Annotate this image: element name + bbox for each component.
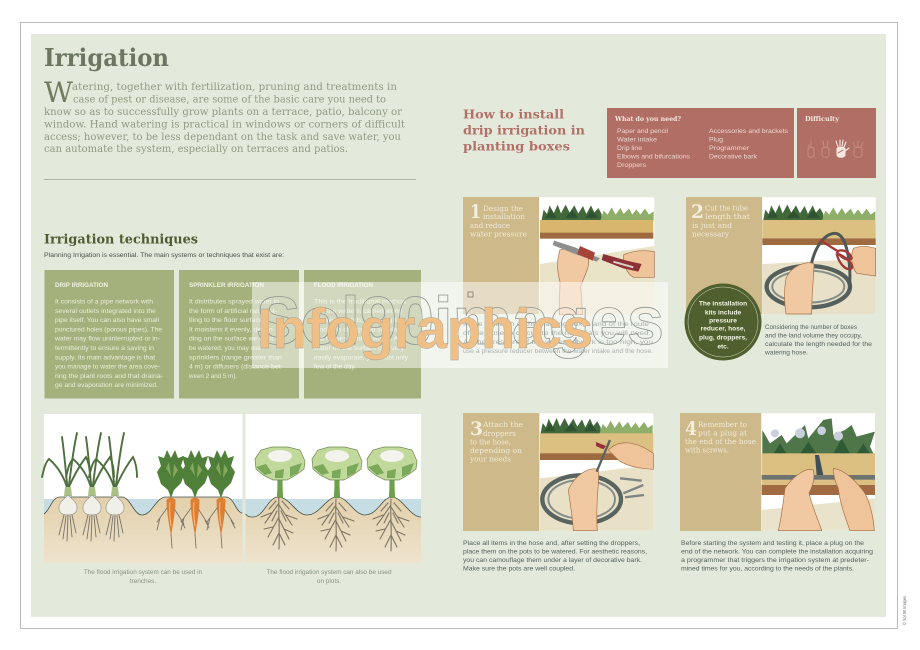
panel: drip irrigation: several outlets integrated into the — [55, 308, 157, 315]
panel: sprinkler irrigation: ding on the surface we want to — [189, 336, 282, 343]
needs heading: What do you need? — [614, 115, 681, 123]
step 3 text: place them on the pots to be watered. For aesthetic reasons, — [463, 548, 647, 556]
copyright: © Sol 90 Images — [902, 596, 907, 625]
step 1 title: 1 — [470, 201, 481, 223]
step 1 image — [539, 197, 654, 315]
callout: installation kits: kits include — [705, 310, 741, 316]
step 1 title: Design the — [483, 204, 523, 213]
callout: installation kits: pressure — [709, 318, 737, 324]
callout: installation kits: plug, droppers, — [699, 334, 747, 342]
panel: flood irrigation: and the water is carried along — [314, 308, 402, 315]
step 3 title: droppers — [483, 429, 516, 438]
panel: drip irrigation — [44, 270, 174, 398]
panel: what do you need — [607, 108, 794, 178]
panel: drip irrigation: punctured holes (porous pipes). The — [55, 326, 163, 333]
heading: how to install: drip irrigation in — [463, 122, 585, 138]
step 4 title: Remember to — [698, 420, 747, 429]
step 3 text — [463, 540, 647, 572]
panel: flood irrigation: This is the traditional method — [314, 298, 406, 306]
panel: what do you need: Drip line — [617, 145, 642, 152]
step 1 title: installation — [483, 212, 525, 221]
panel: drip irrigation: you manage to water the area cove- — [55, 364, 160, 371]
caption: plots: The flood irrigation system can also be used — [266, 569, 392, 576]
callout: installation kits: The installation — [699, 300, 747, 308]
callout: installation kits: reducer, hose, — [701, 326, 746, 332]
panel: sprinkler irrigation — [179, 270, 299, 398]
step 2 title: necessary — [692, 230, 730, 238]
panel: sprinkler irrigation: ween 2 and 5 m). — [188, 373, 237, 380]
step 4 title: 4 — [685, 418, 697, 440]
step 4 title: with screws. — [685, 446, 729, 454]
panel: sprinkler irrigation: It moistens it evenly, depen- — [189, 326, 275, 333]
step 4 text: mined times for you, according to the needs of the plants. — [681, 566, 854, 572]
step 3 — [463, 413, 653, 572]
panel: what do you need: Water intake — [617, 136, 657, 144]
panel: flood irrigation: easily evaporate, you must only — [314, 354, 409, 361]
icon: hand four fingers — [853, 141, 863, 157]
step 4 text: Before starting the system and testing it, place a plug on the — [681, 540, 864, 547]
step 2 title: 2 — [691, 201, 704, 223]
step 1 text: of the hose to calculate the materials you will need. — [463, 330, 651, 337]
step 2 text: calculate the length needed for the — [765, 341, 872, 348]
step 4 text: end of the network. You can complete the installation acquiring — [681, 548, 873, 556]
illustration: flood irrigation in trenches — [42, 414, 242, 563]
panel: what do you need: Paper and pencil — [617, 128, 669, 135]
step 1 — [463, 197, 654, 355]
step 4 image — [762, 413, 875, 531]
panel: what do you need: Droppers — [617, 162, 647, 169]
step 2 text: Considering the number of boxes — [765, 324, 857, 331]
heading: how to install: How to install — [463, 106, 564, 122]
step 4 title: the end of the hose — [685, 437, 756, 446]
step 2 tan box — [686, 197, 762, 314]
step 2 title: is just and — [692, 221, 732, 230]
heading: how to install — [463, 106, 585, 154]
watermark — [252, 282, 668, 368]
step 3 title: 3 — [470, 418, 483, 440]
panel: drip irrigation: It consists of a pipe network with — [55, 298, 153, 306]
small square mark — [468, 292, 473, 297]
panel: drip irrigation: supply. Its main advantage is that — [55, 354, 155, 361]
step 1 text — [463, 321, 654, 355]
step 2 text — [764, 324, 872, 356]
panel: flood irrigation — [304, 270, 421, 398]
step 3 text: you can camouflage them under a layer of decorative bark. — [463, 557, 642, 564]
title: Irrigation — [44, 43, 169, 72]
panel: sprinkler irrigation: tling to the floor surface. — [189, 317, 265, 324]
flood heading: FLOOD IRRIGATION — [314, 282, 373, 289]
step 3 title: Attach the — [482, 420, 523, 429]
cabbage plants — [255, 447, 417, 551]
intro text block: case of pest or disease, are some of the basic care you need to — [73, 94, 386, 106]
drop cap: W — [44, 76, 73, 109]
techniques intro: Planning Irrigation is essential. The main systems or techniques that exist are: — [44, 252, 284, 259]
intro text block: know so as to successfully grow plants on a terrace, patio, balcony or — [44, 107, 402, 118]
caption: trenches: trenches. — [130, 578, 156, 585]
panel: sprinkler irrigation: It distributes sprayed water in — [189, 298, 279, 306]
panel: sprinkler irrigation: sprinklers (range greater than — [189, 354, 282, 361]
step 3 image — [540, 413, 653, 531]
panel: sprinkler irrigation: the form of artificial rain, set- — [189, 308, 277, 315]
step 3 title — [469, 418, 523, 464]
caption: plots: on plots. — [317, 578, 341, 585]
panel: sprinkler irrigation: 4 m) or diffusers (distance bet- — [189, 364, 283, 371]
panel: drip irrigation: termittently to ensure a saving in — [55, 345, 154, 352]
caption: trenches: The flood irrigation system can be used in — [84, 569, 203, 576]
icon: hand two fingers — [822, 141, 829, 157]
step 4 tan box — [680, 413, 761, 531]
panel: flood irrigation: few of the day. — [314, 364, 356, 371]
caption: plots — [266, 569, 392, 585]
step 1 text: As the pressure of the water network is too high, you — [463, 339, 654, 346]
panel: drip irrigation: ring the plant roots and that draina- — [55, 373, 163, 380]
panel: sprinkler irrigation: be watered, you may use — [189, 345, 262, 352]
step 3 tan box — [463, 413, 539, 531]
intro text block — [44, 76, 405, 155]
step 1 title: and reduce — [470, 221, 510, 230]
step 3 text: Place all items in the hose and, after setting the droppers, — [463, 540, 640, 547]
intro text block: can automate the system, especially on terraces and patios. — [44, 144, 348, 155]
panel: what do you need: Accessories and brackets — [709, 128, 789, 135]
callout: installation kits — [684, 284, 762, 360]
panel: difficulty — [797, 108, 876, 178]
step 1 text: Make a sketch of the planting boxes and of the route — [463, 321, 650, 328]
step 2 text: watering hose. — [764, 350, 808, 356]
garlic plants — [42, 433, 137, 541]
step 3 text: Make sure the pots are well coupled. — [463, 566, 575, 572]
panel: flood irrigation: but it uses a lot of water. As — [314, 336, 402, 343]
watermark: outline wordmark: Sol90images — [256, 283, 664, 359]
panel: what do you need: Programmer — [709, 145, 750, 152]
step 4 text: a programmer that triggers the irrigation system at predeter- — [681, 557, 869, 564]
step 4 text — [681, 540, 873, 572]
panel: drip irrigation: pipe itself. You can also have small — [55, 317, 159, 324]
icon: hand highlighted — [836, 140, 849, 157]
step 1 title — [470, 201, 527, 238]
sprinkler heading: SPRINKLER IRRIGATION — [189, 282, 264, 289]
step 2 title — [691, 201, 750, 238]
step 1 title: water pressure — [470, 230, 527, 238]
caption: trenches — [84, 569, 203, 585]
illustration: flood irrigation on plots — [246, 414, 421, 563]
panel: drip irrigation: ge and evaporation are minimized. — [55, 382, 158, 389]
callout: installation kits: etc. — [717, 344, 729, 350]
carrot plants — [157, 450, 235, 548]
intro text block: atering, together with fertilization, pruning and treatments in — [72, 82, 398, 93]
step 3 title: depending on — [470, 446, 522, 455]
step 2 — [686, 197, 876, 356]
watermark: orange wordmark: Infographics — [257, 297, 593, 361]
step 1 text: use a pressure reducer between the water intake and the hose. — [463, 348, 653, 355]
step 2 text: and the land volume they occupy, — [765, 332, 862, 340]
heading: how to install: planting boxes — [463, 138, 570, 154]
drip heading: DRIP IRRIGATION — [55, 282, 108, 289]
step 1 tan box — [463, 197, 539, 314]
heading: irrigation techniques: Irrigation techniques — [44, 232, 198, 248]
step 2 title: Cut the tube — [705, 204, 748, 212]
panel: what do you need: Decorative bark — [709, 154, 758, 160]
panel: flood irrigation: water on the surface can very — [313, 345, 405, 352]
panel: what do you need: Elbows and bifurcations — [617, 154, 691, 160]
step 2 image — [762, 197, 876, 314]
intro text block: access; however, to be less dependant on the task and save water, you — [44, 132, 402, 143]
panel: drip irrigation: water may flow uninterrupted or in- — [54, 336, 160, 343]
step 4 — [680, 413, 875, 572]
step 2 title: length that — [705, 212, 750, 221]
icon: hand one finger — [808, 141, 814, 157]
step 3 title: to the hose, — [470, 438, 511, 446]
panel: what do you need: Plug — [709, 136, 723, 144]
intro text block: window. Hand watering is practical in windows or corners of difficult — [44, 120, 405, 130]
step 4 title — [685, 418, 756, 454]
step 3 title: your needs — [469, 454, 511, 464]
difficulty heading: Difficulty — [805, 115, 839, 123]
panel: flood irrigation: furrows or plots, covering the — [314, 317, 405, 324]
step 4 title: put a plug at — [698, 428, 747, 438]
panel: flood irrigation: land. It is cheap and simple, — [314, 326, 399, 333]
